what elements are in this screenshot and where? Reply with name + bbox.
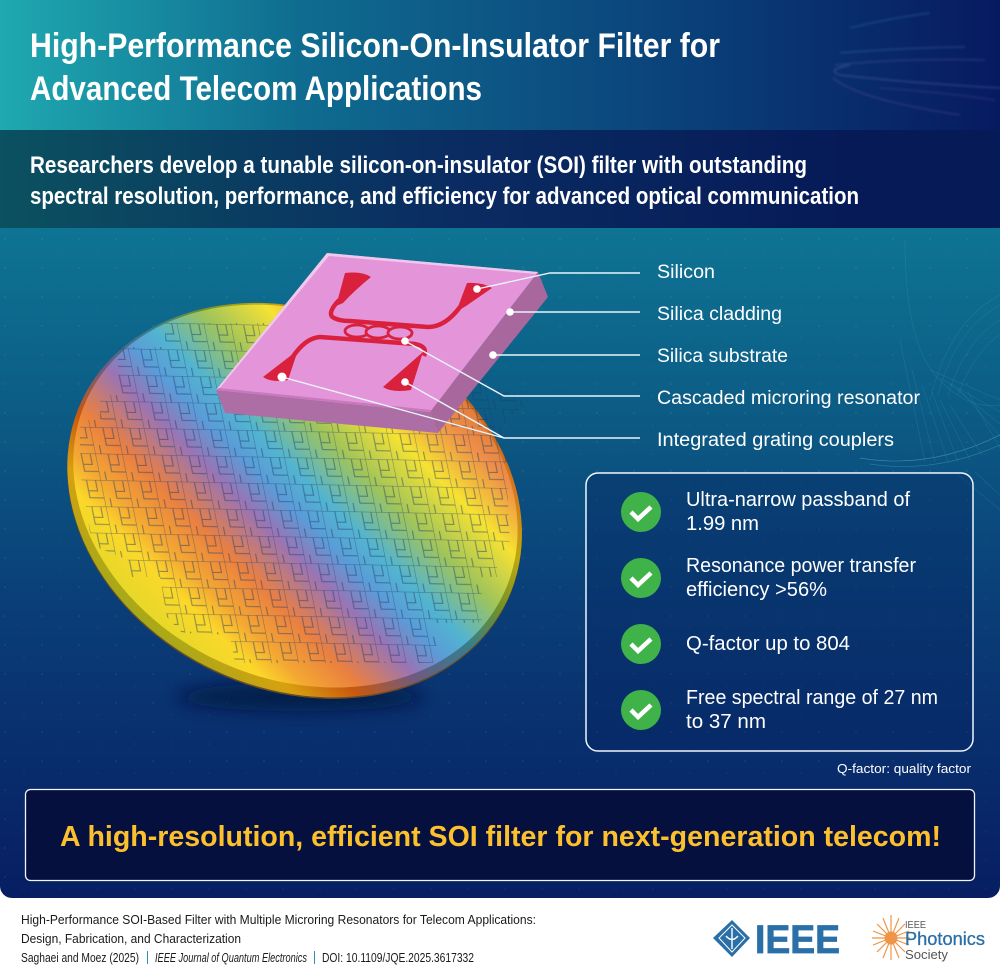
subtitle: Researchers develop a tunable silicon-on-insulator (SOI) filter with outstanding (30, 152, 807, 179)
chip layer labels: Silicon (657, 262, 715, 283)
subtitle (30, 152, 859, 210)
key result text: Free spectral range of 27 nm (686, 687, 938, 709)
conclusion callout (26, 790, 974, 880)
key result text: efficiency >56% (686, 579, 827, 601)
IEEE logo: IEEE (755, 918, 840, 962)
citation: DOI: 10.1109/JQE.2025.3617332 (322, 951, 474, 965)
IEEE logo (713, 918, 840, 962)
leader lines (282, 273, 640, 438)
citation: Design, Fabrication, and Characterization (21, 931, 241, 946)
chip layer labels: Silica cladding (657, 304, 782, 325)
IEEE Photonics Society logo: Photonics (905, 929, 985, 949)
wafer die grid (80, 323, 529, 663)
silicon wafer (67, 302, 529, 718)
citation (21, 912, 536, 965)
subtitle band (0, 130, 1000, 228)
chip layer labels: Silica substrate (657, 346, 788, 367)
title: Advanced Telecom Applications (30, 70, 482, 108)
decorative light streaks top right (833, 13, 1000, 115)
decorative network mesh right (860, 240, 1000, 510)
check icons (621, 492, 661, 730)
title: High-Performance Silicon-On-Insulator Filter for (30, 27, 720, 65)
IEEE Photonics Society logo: Society (905, 947, 948, 962)
waveguides and couplers (263, 272, 492, 391)
key result text: Q-factor up to 804 (686, 633, 850, 655)
chip layer labels: Integrated grating couplers (657, 430, 894, 451)
footnote: Q-factor: quality factor (837, 762, 971, 776)
subtitle: spectral resolution, performance, and efficiency for advanced optical communication (30, 183, 859, 210)
layered SOI chip (216, 253, 548, 433)
key result text: 1.99 nm (686, 513, 759, 535)
IEEE Photonics Society logo (872, 915, 985, 962)
citation: Saghaei and Moez (2025) (21, 951, 139, 965)
chip layer labels (657, 262, 921, 451)
key result text: to 37 nm (686, 711, 766, 733)
key result text: Resonance power transfer (686, 555, 916, 577)
IEEE Photonics Society logo: IEEE (905, 919, 926, 931)
key result text (686, 489, 938, 733)
key results panel (586, 473, 973, 751)
conclusion callout: A high-resolution, efficient SOI filter for next-generation telecom! (60, 821, 941, 853)
chip layer labels: Cascaded microring resonator (657, 388, 921, 409)
key result text: Ultra-narrow passband of (686, 489, 910, 511)
title (30, 27, 720, 108)
citation: High-Performance SOI-Based Filter with Multiple Microring Resonators for Telecom Applications: (21, 912, 536, 927)
leader dots (278, 285, 514, 386)
citation: IEEE Journal of Quantum Electronics (155, 951, 307, 965)
